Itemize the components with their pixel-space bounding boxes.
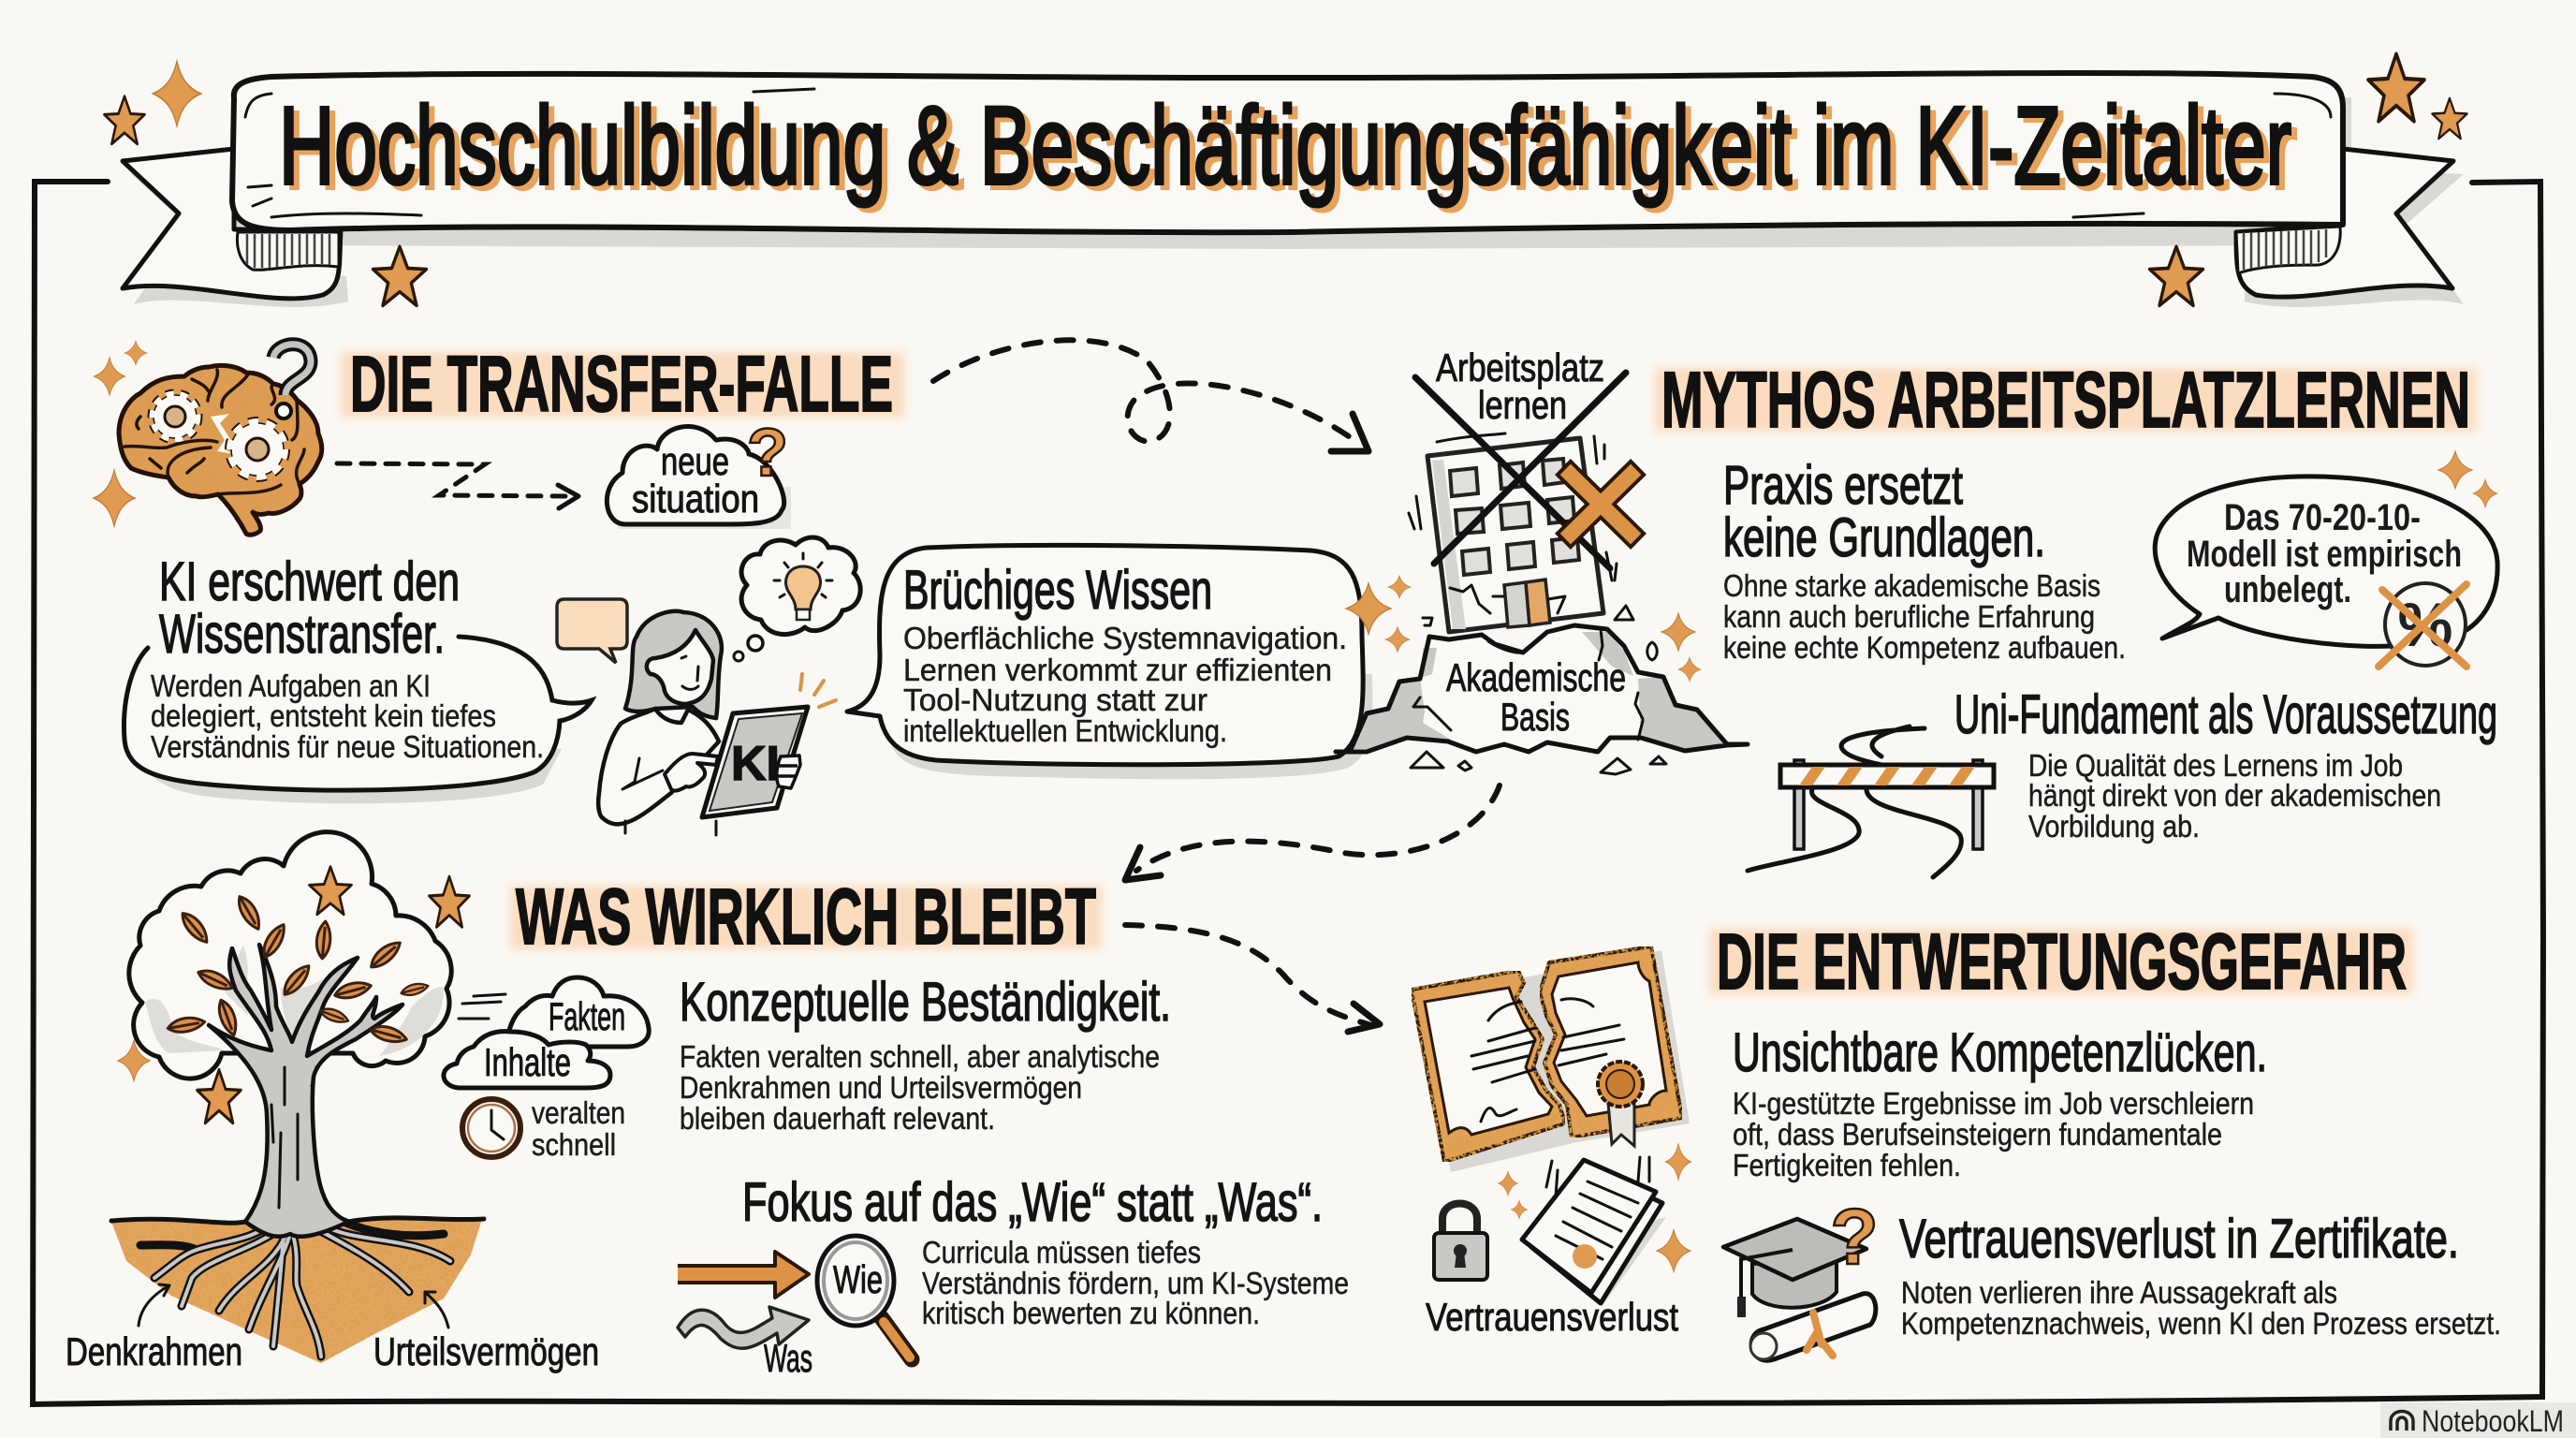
icon: sparkles by bubble [2438,451,2497,507]
icon: wavy grey arrow [678,1307,809,1348]
label: Urteilsvermögen: Urteilsvermögen [373,1329,599,1373]
label: Arbeitsplatz lernen: Arbeitsplatz [1436,345,1604,389]
icon: crossed percent [2378,583,2466,667]
text: Praxis copy: Ohne starke akademische Basis [1723,568,2100,603]
label: Arbeitsplatz lernen [1436,345,1604,427]
icon: person with KI tablet [598,611,836,835]
text: Curricula copy [922,1235,1349,1330]
label: Akademische Basis [1446,655,1626,739]
text: bubble copy: Verständnis für neue Situationen. [151,729,544,764]
label: veralten schnell: veralten [532,1095,625,1130]
text: Qualität copy [2028,748,2441,844]
icon: thought cloud with light bulb [734,537,860,661]
label: Akademische Basis: Akademische [1446,655,1626,699]
text: Praxis copy: keine echte Kompetenz aufbauen. [1723,630,2126,665]
icon: sparkles around rock [1346,576,1701,682]
subheading: Brüchiges Wissen: Brüchiges Wissen [903,560,1212,621]
icons: header stars [104,54,2467,305]
text: Vertrauensverlust copy: Noten verlieren ihre Aussagekraft als [1901,1275,2337,1310]
icon: tree with roots [66,832,599,1373]
icon: magnifier Wie: Wie [833,1257,883,1301]
label: Arbeitsplatz lernen: lernen [1478,383,1567,427]
subheading: Praxis ersetzt keine Grundlagen [1723,455,2045,568]
subheading: Unsichtbare Kompetenzlücken: Unsichtbare Kompetenzlücken. [1733,1022,2267,1083]
label: Inhalte: Inhalte [484,1040,571,1084]
arrow: brain to new situation [337,463,578,508]
icon: cloud neue situation: ? [747,416,788,491]
text: Konzeptuelle copy: Fakten veralten schnell, aber analytische [680,1039,1160,1074]
subheading: Konzeptuelle Beständigkeit: Konzeptuelle Beständigkeit. [680,972,1171,1033]
text: Brüchiges Wissen copy: Oberflächliche Systemnavigation. [903,621,1347,655]
label: Was: Was [764,1336,812,1380]
text: Unsichtbare copy: oft, dass Berufseinsteigern fundamentale [1733,1117,2222,1152]
icon: sparkles left [94,341,147,526]
icon: person with KI tablet: KI [731,737,780,791]
label: Akademische Basis: Basis [1500,695,1570,739]
arrow: mythos to bleibt [1125,785,1500,880]
icon: orange arrow to magnifier [678,1252,809,1298]
icon: torn diploma [1412,946,1690,1172]
icon: crossed percent: % [2398,590,2452,659]
subheading: Fokus auf das Wie: Fokus auf das „Wie“ statt „Was“. [742,1172,1323,1233]
label: Vertrauensverlust: Vertrauensverlust [1426,1295,1678,1339]
text: Praxis copy [1723,568,2126,665]
text: 70-20-10: unbelegt. [2224,569,2351,610]
heading: Die Transfer-Falle [341,340,904,428]
label: veralten schnell: schnell [532,1127,616,1162]
text: Unsichtbare copy: KI-gestützte Ergebnisse im Job verschleiern [1733,1086,2254,1121]
text: 70-20-10 [2187,497,2462,610]
subheading: KI erschwert den Wissenstransfer: KI erschwert den [159,551,460,612]
panel: Mythos Arbeitsplatzlernen [1336,345,2497,877]
icon: graduation cap and scroll: ? [1830,1193,1879,1281]
label: Fakten: Fakten [549,994,625,1038]
callout: Brüchiges Wissen [847,545,1372,779]
icon: cloud neue situation [607,416,791,529]
text: bubble copy: delegiert, entsteht kein tiefes [151,698,496,733]
title banner [123,73,2464,307]
text: Brüchiges Wissen copy: intellektuellen Entwicklung. [903,713,1227,748]
icon: road barrier [1748,726,1994,877]
icon: magnifier Wie [817,1236,912,1359]
text: Praxis copy: kann auch berufliche Erfahrung [1723,599,2095,634]
text: Curricula copy: Curricula müssen tiefes [922,1235,1201,1269]
text: 70-20-10: Modell ist empirisch [2187,534,2462,575]
label: Denkrahmen: Denkrahmen [66,1329,242,1373]
arrow: transfer to mythos [933,340,1368,451]
text: Curricula copy: Verständnis fördern, um KI-Systeme [922,1266,1349,1300]
icon: clouds Fakten and Inhalte [444,977,649,1088]
text: bubble copy: Werden Aufgaben an KI [151,668,431,703]
text: Brüchiges Wissen copy: Lernen verkommt zur effizienten [903,653,1332,687]
callout: 70-20-10 speech bubble [2155,477,2497,667]
text: Qualität copy: Die Qualität des Lernens im Job [2028,748,2403,783]
text: Qualität copy: hängt direkt von der akademischen [2028,778,2441,813]
subheading: Praxis ersetzt keine Grundlagen: keine Grundlagen. [1723,507,2045,568]
panel: Die Entwertungsgefahr [1412,917,2501,1360]
callout: left speech bubble [124,637,592,803]
text: Vertrauensverlust copy [1901,1275,2501,1341]
label: neue situation [632,439,759,521]
text: Unsichtbare copy [1733,1086,2254,1182]
heading: Was wirklich bleibt [510,873,1102,961]
label: neue situation: neue [661,439,729,483]
text: Curricula copy: kritisch bewerten zu können. [922,1296,1260,1330]
subheading: KI erschwert den Wissenstransfer: Wissenstransfer. [159,604,445,665]
icon: falling papers [1498,1144,1690,1306]
icon: clock [462,1099,520,1157]
panel: Die Transfer-Falle [94,340,1372,835]
text: Brüchiges Wissen copy [903,621,1347,748]
heading: Die Transfer-Falle: DIE TRANSFER-FALLE [350,340,893,428]
text: Brüchiges Wissen copy: Tool-Nutzung statt zur [903,682,1208,717]
text: bubble copy [151,668,544,764]
icon: lock [1434,1204,1487,1280]
subheading: KI erschwert den Wissenstransfer [159,551,460,665]
text: Unsichtbare copy: Fertigkeiten fehlen. [1733,1148,1961,1182]
label: neue situation: situation [632,477,759,521]
subheading: Praxis ersetzt keine Grundlagen: Praxis ersetzt [1723,455,1963,516]
text: 70-20-10: Das 70-20-10- [2224,497,2421,538]
text: Konzeptuelle copy: bleiben dauerhaft relevant. [680,1101,995,1136]
arrow: bleibt to entwertung [1125,925,1380,1032]
panel: Was wirklich bleibt [66,832,1349,1380]
text: Konzeptuelle copy: Denkrahmen und Urteilsvermögen [680,1070,1082,1105]
icon: graduation cap and scroll [1723,1193,1879,1360]
icon: brain with gears [119,345,322,535]
heading: Was wirklich bleibt: WAS WIRKLICH BLEIBT [516,873,1096,961]
icon: empty speech note [557,599,627,663]
text: Konzeptuelle copy [680,1039,1160,1136]
icon: cracked building on rock [1336,345,1748,774]
text: Qualität copy: Vorbildung ab. [2028,809,2200,844]
label: veralten schnell [532,1095,625,1162]
